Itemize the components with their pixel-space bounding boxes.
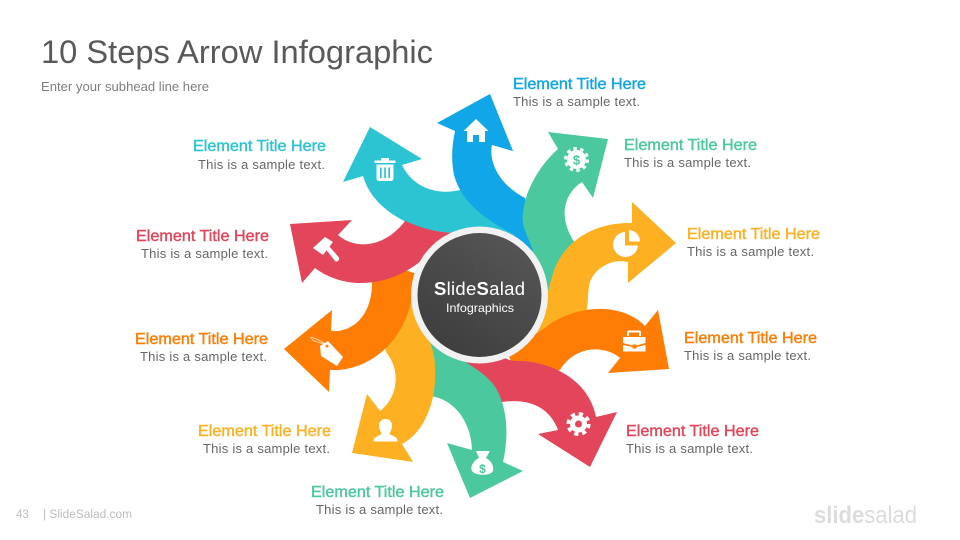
label: green dollar [624, 137, 757, 170]
icon: briefcase [623, 330, 646, 352]
footer site name: | SlideSalad.com [43, 509, 132, 521]
label: blue: This is a sample text. [513, 94, 640, 109]
label: orange briefcase [684, 330, 817, 363]
icon: user [374, 419, 398, 442]
label: red gavel: This is a sample text. [141, 246, 268, 261]
arrow: cyan trash step [343, 127, 522, 295]
label: cyan: This is a sample text. [198, 157, 325, 172]
label: orange briefcase: This is a sample text. [684, 348, 811, 363]
icon: dollar gear: $ [573, 152, 581, 168]
icon: money bag [471, 451, 493, 476]
arrow: orange briefcase step [480, 295, 669, 380]
icon: pie chart [613, 230, 640, 257]
label: orange tag: Element Title Here [135, 331, 268, 348]
label: yellow pie: This is a sample text. [687, 244, 814, 259]
icon: money bag: $ [479, 462, 486, 476]
icon: price tag [311, 337, 343, 366]
arrow: red gear step [450, 295, 617, 467]
footer logo: slidesalad [814, 502, 917, 529]
hub label: Infographics [446, 301, 514, 315]
label: green money bag [311, 484, 444, 517]
icon: trash can [374, 158, 396, 181]
arrow: green money bag step [410, 295, 523, 498]
arrow: yellow pie step [480, 202, 676, 350]
center hub [411, 226, 548, 364]
label: orange tag [135, 331, 268, 364]
label: yellow user: This is a sample text. [203, 441, 330, 456]
icon: gavel [313, 237, 339, 261]
icon: house [464, 119, 488, 142]
label: green money bag: Element Title Here [311, 484, 444, 501]
label: red gavel [136, 228, 269, 261]
label: green dollar: This is a sample text. [624, 155, 751, 170]
label: orange briefcase: Element Title Here [684, 330, 817, 347]
arrow: blue home step [437, 94, 540, 295]
footer page number: 43 [16, 509, 29, 521]
arrow: yellow user step [352, 295, 480, 462]
label: green dollar: Element Title Here [624, 137, 757, 154]
arrow: red gavel step [290, 220, 480, 295]
hub brand name: SlideSalad [434, 278, 525, 299]
label: yellow user [198, 423, 331, 456]
label: red gear: Element Title Here [626, 423, 759, 440]
arrow: green dollar step [480, 132, 608, 295]
label: yellow user: Element Title Here [198, 423, 331, 440]
label: yellow pie [687, 226, 820, 259]
subhead: Enter your subhead line here [41, 80, 209, 94]
title: 10 Steps Arrow Infographic [41, 34, 433, 70]
icon: gear [569, 414, 588, 434]
label: yellow pie: Element Title Here [687, 226, 820, 243]
label: red gear: This is a sample text. [626, 441, 753, 456]
arrow: orange tag step [284, 260, 480, 392]
label: cyan: Element Title Here [193, 138, 326, 155]
icon: dollar gear [566, 148, 588, 170]
label: cyan [193, 138, 326, 172]
label: blue: Element Title Here [513, 76, 646, 93]
label: red gear [626, 423, 759, 456]
label: blue [513, 76, 646, 109]
label: green money bag: This is a sample text. [316, 502, 443, 517]
label: red gavel: Element Title Here [136, 228, 269, 245]
label: orange tag: This is a sample text. [140, 349, 267, 364]
